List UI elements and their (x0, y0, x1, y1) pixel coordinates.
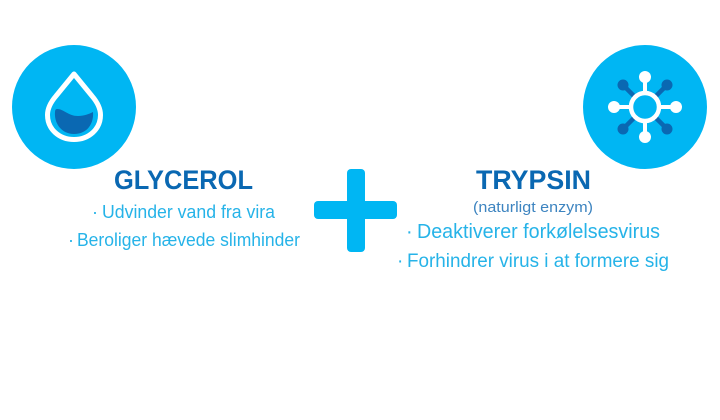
text block: glycerol benefits (68, 202, 300, 250)
text block: trypsin benefits: Forhindrer virus i at formere sig (407, 251, 669, 272)
text block: glycerol benefits: · (68, 230, 74, 250)
text block: trypsin benefits (397, 221, 669, 272)
text block: glycerol benefits: Beroliger hævede slimhinder (77, 230, 300, 250)
icon: virus (583, 45, 707, 169)
text block: trypsin benefits: · (397, 251, 403, 272)
icon: water drop (12, 45, 136, 169)
text block: glycerol benefits: · (92, 202, 98, 222)
heading: trypsin: TRYPSIN (476, 165, 591, 195)
subheading: natural enzyme: (naturligt enzym) (473, 199, 593, 216)
text block: trypsin benefits: Deaktiverer forkølelsesvirus (417, 221, 660, 243)
icon: plus (314, 169, 397, 252)
text block: glycerol benefits: Udvinder vand fra vira (102, 202, 276, 222)
text block: trypsin benefits: · (406, 221, 413, 243)
heading: glycerol: GLYCEROL (114, 165, 253, 195)
